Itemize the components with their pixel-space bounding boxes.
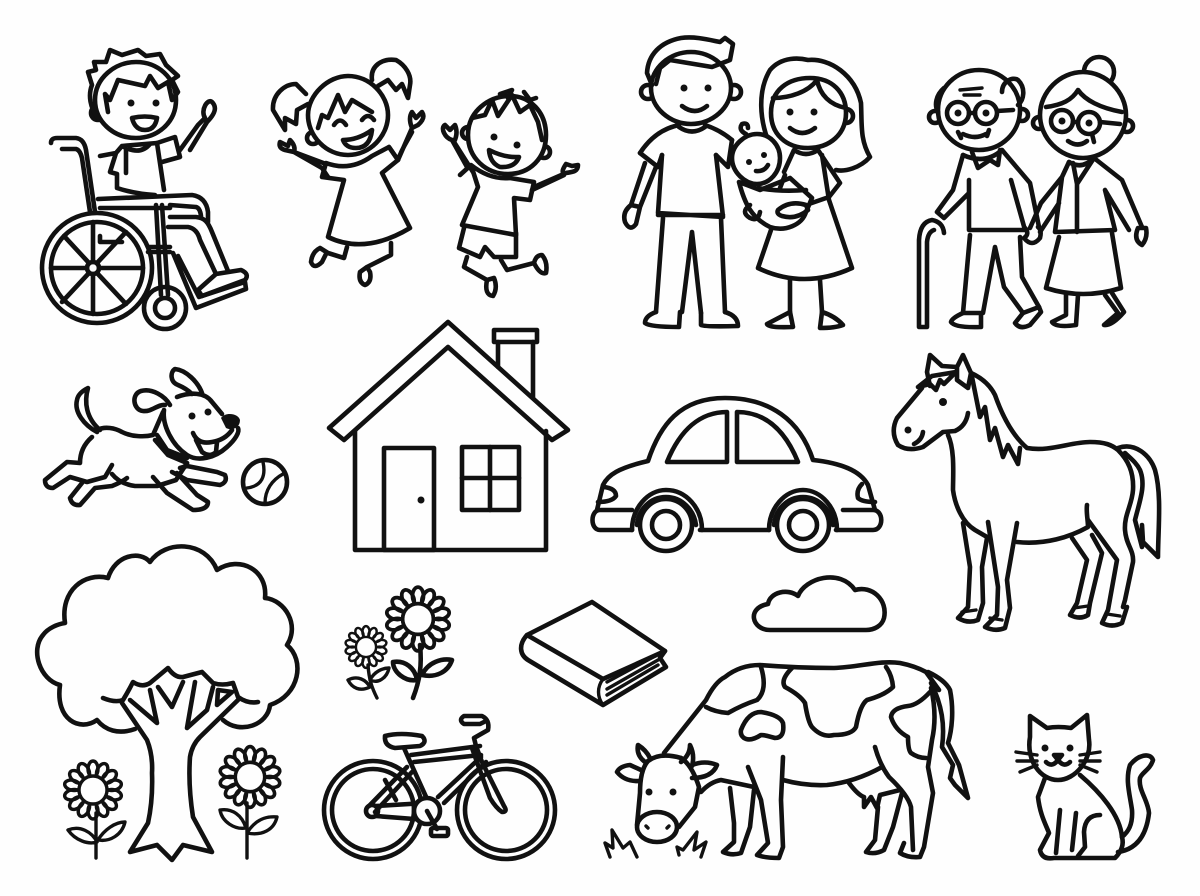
icon: car [592,398,881,551]
icon: dog with ball [45,369,287,510]
icon: house [329,322,568,550]
icon: sunflower left of tree [64,761,125,858]
icon: grandfather [919,70,1041,327]
icon: mother with baby [732,59,870,328]
icon: cloud [754,577,885,630]
icon: cow [605,662,968,858]
icon: horse [894,355,1159,630]
icon: boy in wheelchair [42,50,247,329]
icon: jumping boy [443,90,578,296]
icon: sunflower right of tree [219,747,281,858]
icon: book [521,602,666,705]
icon: jumping girl [273,60,423,285]
icon: large flower [386,587,452,698]
icon: father [624,37,741,327]
icon: tree [37,546,297,860]
icon: grandmother [1030,57,1146,326]
icon: cat [1016,715,1153,858]
icon: bicycle [324,716,555,859]
icon: small flower [345,626,389,698]
